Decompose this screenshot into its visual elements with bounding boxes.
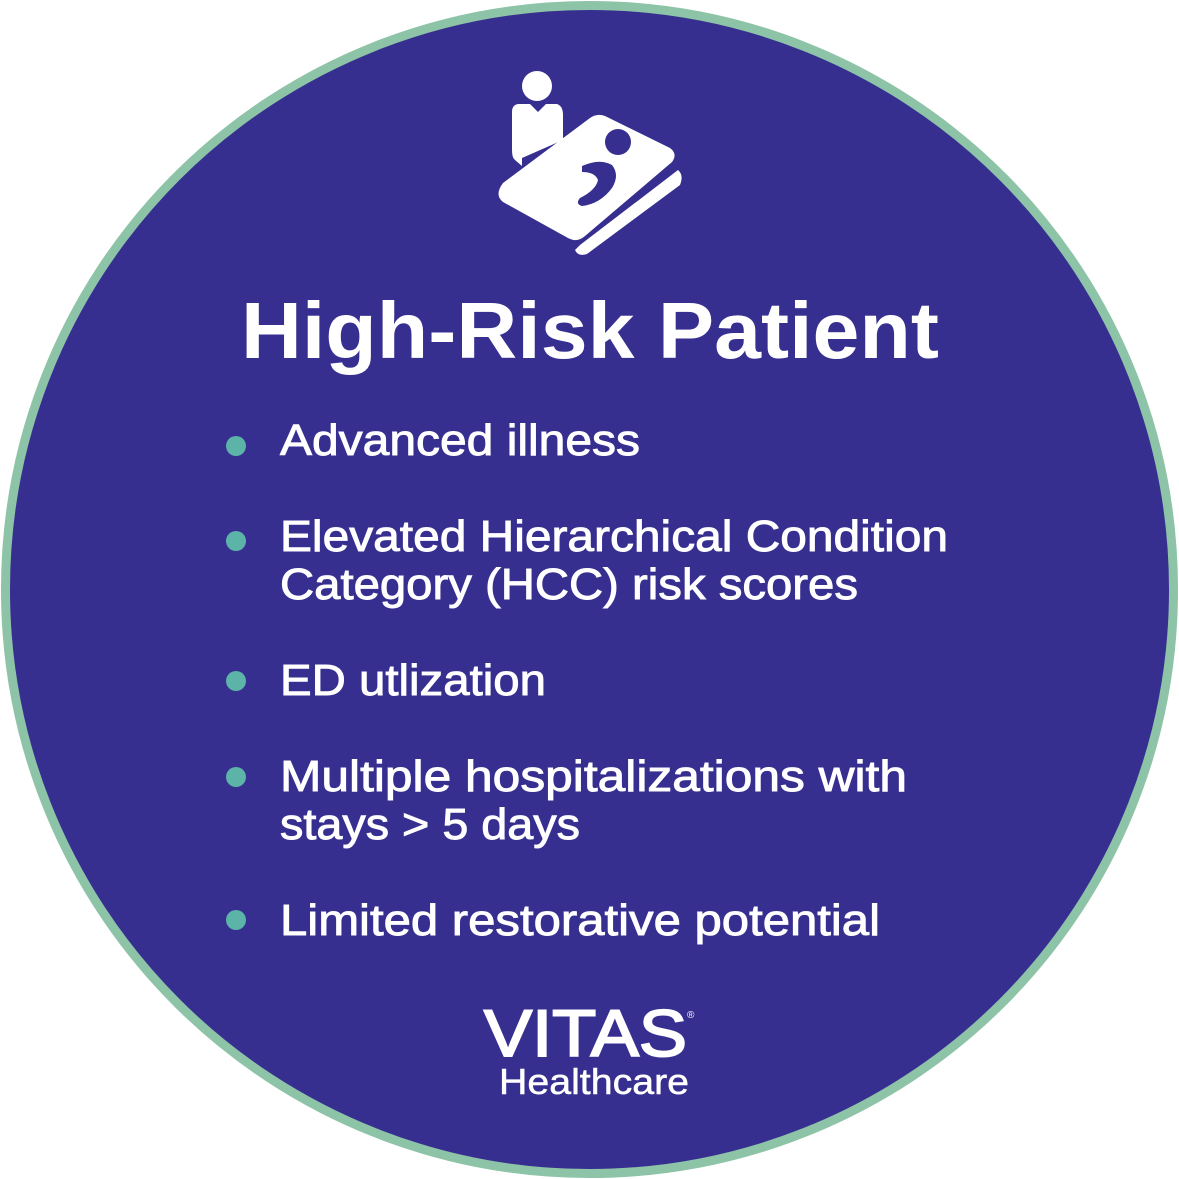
list: risk factors: ED utlization — [280, 656, 546, 705]
icon: patient figure cutout — [578, 129, 631, 206]
logo: VITAS Healthcare — [484, 996, 695, 1102]
list: risk factors: Limited restorative potential — [280, 896, 880, 945]
list: risk factors: Advanced illness — [280, 416, 640, 465]
logo: VITAS Healthcare: Healthcare — [499, 1061, 689, 1102]
logo: VITAS Healthcare: VITAS — [484, 996, 687, 1070]
logo: VITAS Healthcare: ® — [687, 1010, 695, 1021]
list: risk factors: Multiple hospitalizations with — [280, 752, 907, 801]
list: risk factors — [226, 416, 948, 945]
title: High-Risk Patient — [241, 286, 939, 375]
list: risk factors: Elevated Hierarchical Condition — [280, 512, 948, 561]
list: risk factors: Category (HCC) risk scores — [280, 560, 858, 609]
icon: caregiver and patient in bed — [498, 71, 682, 255]
list: risk factors: stays > 5 days — [280, 800, 580, 849]
